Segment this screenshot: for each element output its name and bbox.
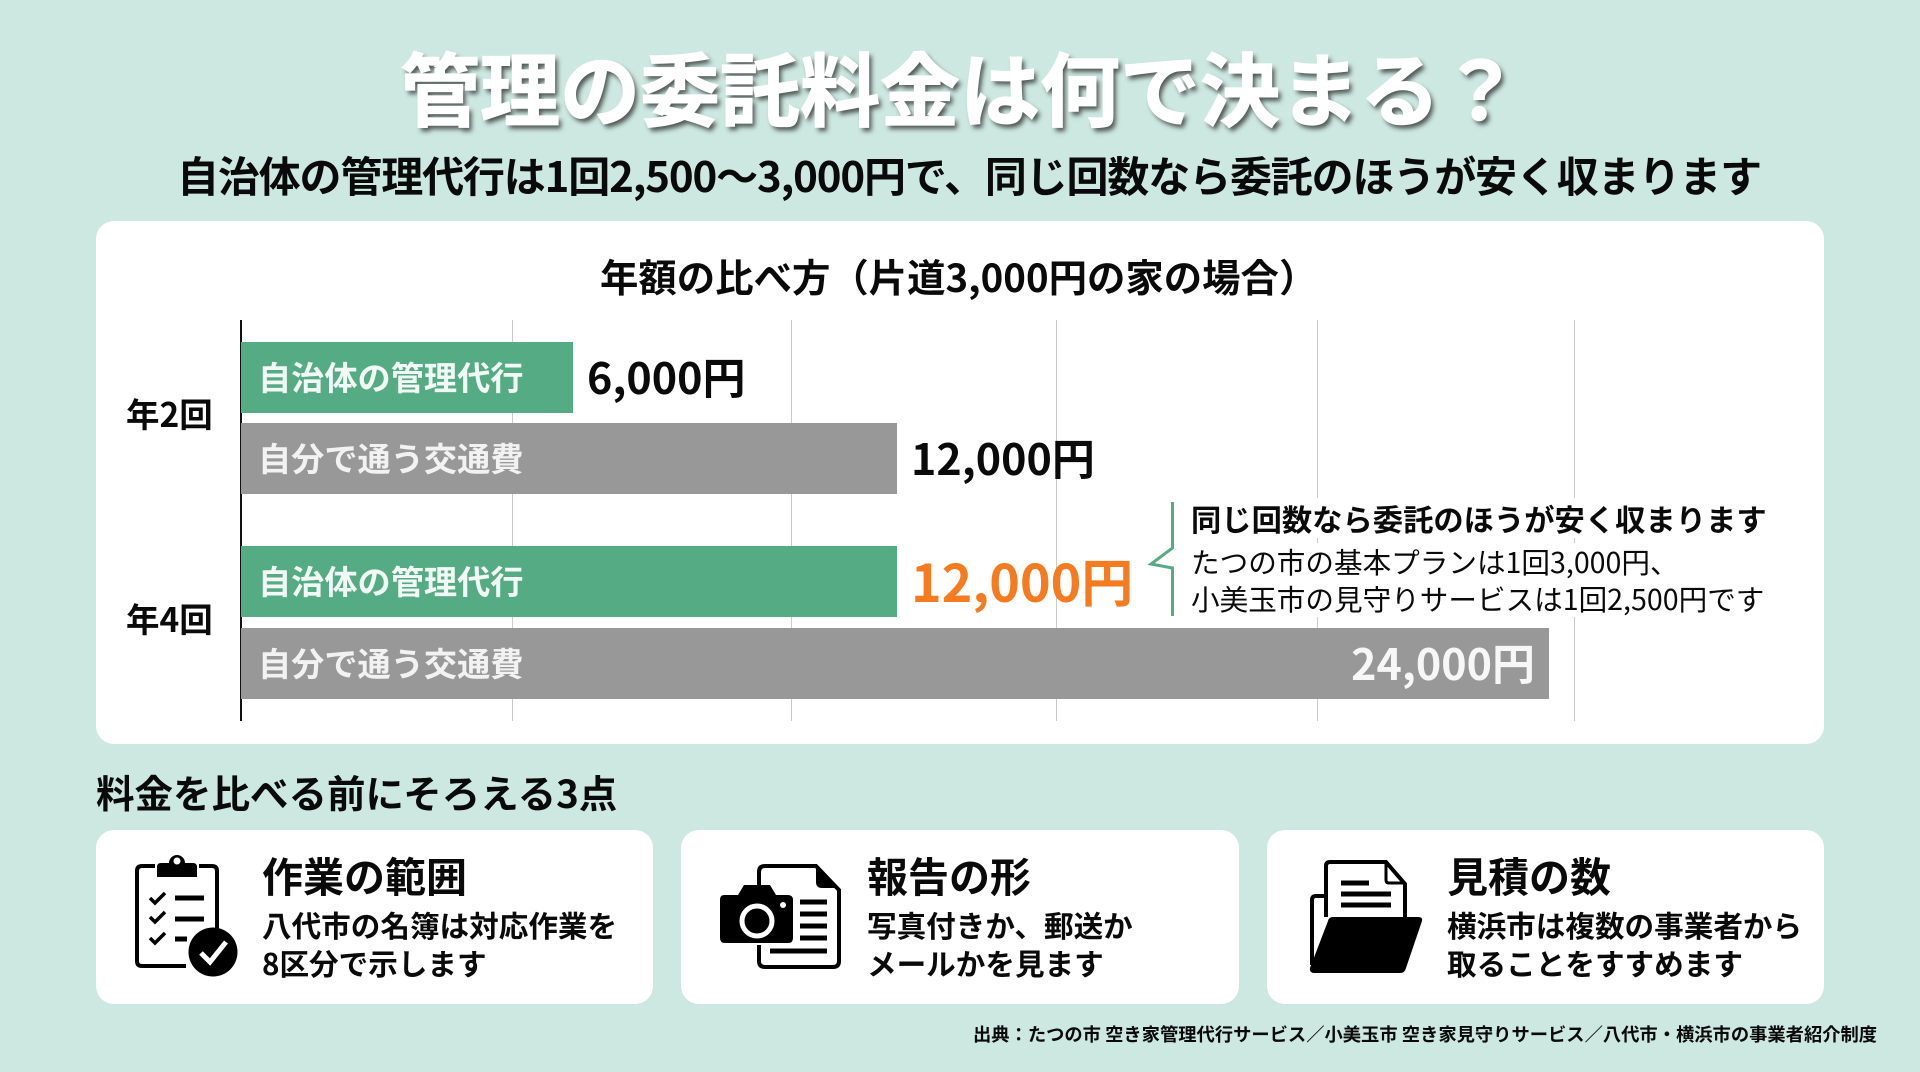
bar: municipal service twice a year: 自治体の管理代行: [258, 351, 524, 400]
chart heading: 年額の比べ方（片道3,000円の家の場合）: [600, 248, 1317, 304]
card text: 8区分で示します: [262, 941, 487, 984]
bar: travel cost twice a year: [241, 423, 897, 494]
highlighted value: 12,000円: 12,000円: [911, 542, 1133, 617]
card heading: 報告の形: 報告の形: [867, 844, 1031, 904]
bar: travel cost four times a year: 自分で通う交通費: [258, 637, 524, 686]
card text: [1447, 903, 1802, 984]
section heading: 料金を比べる前にそろえる3点: [96, 764, 617, 820]
icon: clipboard with check: [135, 855, 238, 976]
value: 12,000円: 12,000円: [911, 426, 1095, 488]
card text: 八代市の名簿は対応作業を: [262, 903, 617, 946]
callout bracket: [1148, 502, 1174, 616]
callout body: [1191, 543, 1764, 617]
bar: travel cost twice a year: 自分で通う交通費: [258, 432, 524, 481]
callout body: 小美玉市の見守りサービスは1回2,500円です: [1191, 578, 1764, 619]
card text: [867, 903, 1133, 984]
source note: 出典：たつの市 空き家管理代行サービス／小美玉市 空き家見守りサービス／八代市・横浜市の事業者紹介制度: [973, 1021, 1877, 1047]
title: 管理の委託料金は何で決まる？: [400, 28, 1520, 144]
value: 24,000円: 24,000円: [1351, 631, 1535, 693]
bar: municipal service twice a year: [241, 342, 573, 413]
card text: 横浜市は複数の事業者から: [1447, 903, 1802, 946]
callout body: たつの市の基本プランは1回3,000円、: [1191, 541, 1679, 582]
subtitle: 自治体の管理代行は1回2,500〜3,000円で、同じ回数なら委託のほうが安く収まります: [177, 144, 1761, 205]
bar: municipal service four times a year: 自治体の管理代行: [258, 555, 524, 604]
card: number of estimates: [1267, 830, 1824, 1004]
card heading: 作業の範囲: 作業の範囲: [262, 844, 467, 904]
bar: municipal service four times a year: [241, 546, 897, 617]
card text: 写真付きか、郵送か: [867, 903, 1133, 946]
card text: [262, 903, 617, 984]
bar chart axis: [240, 320, 242, 721]
icon: folder with document: [1310, 860, 1422, 973]
card: scope of work: [96, 830, 653, 1004]
card: report format: [681, 830, 1239, 1004]
panel: annual cost chart: [96, 221, 1824, 744]
row label: 年4回: 年4回: [126, 593, 213, 642]
card text: メールかを見ます: [867, 941, 1104, 984]
row label: 年2回: 年2回: [126, 388, 213, 437]
card heading: 見積の数: 見積の数: [1447, 844, 1611, 904]
bar: travel cost four times a year: [241, 628, 1549, 699]
value: 6,000円: 6,000円: [587, 345, 745, 407]
card text: 取ることをすすめます: [1447, 941, 1743, 984]
icon: camera and document: [720, 864, 841, 969]
callout heading: 同じ回数なら委託のほうが安く収まります: [1191, 496, 1767, 540]
